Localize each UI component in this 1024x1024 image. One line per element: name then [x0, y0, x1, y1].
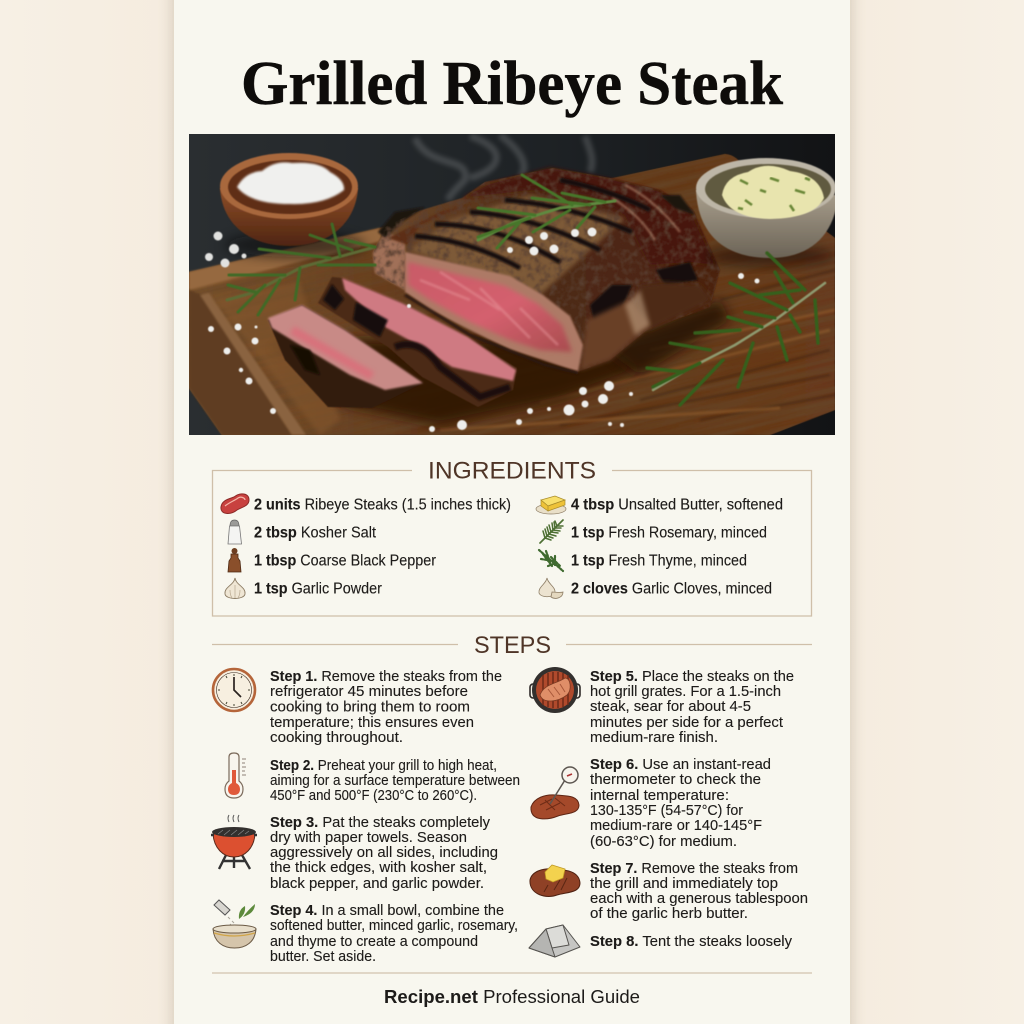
step 1: temperature; this ensures even	[270, 714, 474, 731]
step 1: cooking to bring them to room	[270, 698, 470, 716]
step 5: Step 5. Place the steaks on the	[590, 668, 794, 685]
loose salt on dark surface	[205, 232, 246, 268]
rosemary sprig on steak	[478, 175, 615, 248]
step 1: cooking throughout.	[270, 729, 403, 746]
step 8: Step 8. Tent the steaks loosely	[590, 933, 792, 950]
rosemary sprig right	[647, 253, 825, 405]
step 3: aggressively on all sides, including	[270, 844, 498, 861]
recipe card	[170, 0, 854, 1024]
bowl of salt	[220, 153, 365, 257]
step 3: Step 3. Pat the steaks completely	[270, 814, 490, 831]
step 4	[213, 900, 518, 965]
ingredient: garlic powder	[225, 578, 382, 598]
middle steak slice	[318, 277, 517, 407]
main ribeye steak	[370, 165, 725, 375]
step 6: thermometer to check the	[590, 771, 761, 788]
salt crystals on board and steak	[208, 228, 760, 432]
step 8	[529, 925, 792, 957]
ingredient: garlic cloves: 2 cloves Garlic Cloves, minced	[571, 580, 772, 598]
step 5: medium-rare finish.	[590, 729, 718, 746]
ingredient: kosher salt: 2 tbsp Kosher Salt	[254, 524, 377, 542]
rosemary sprig left	[227, 224, 375, 315]
icon: seasoning and mixing bowl	[213, 900, 256, 948]
footer: Recipe.net Professional Guide	[384, 987, 640, 1007]
step 5: hot grill grates. For a 1.5-inch	[590, 683, 781, 700]
icon: thermometer	[225, 753, 246, 798]
step 1	[213, 668, 502, 746]
ingredient: butter: 4 tbsp Unsalted Butter, softened	[571, 496, 783, 514]
step 2: Step 2. Preheat your grill to high heat,	[270, 757, 497, 774]
step 4: Step 4. In a small bowl, combine the	[270, 902, 504, 919]
smoke	[415, 135, 592, 200]
step 1: refrigerator 45 minutes before	[270, 683, 468, 700]
icon: clock	[213, 669, 255, 711]
title: Grilled Ribeye Steak	[241, 50, 783, 118]
step 6: internal temperature:	[590, 787, 729, 804]
step 7	[530, 860, 808, 922]
ingredients panel	[212, 470, 812, 616]
ingredient: rosemary: 1 tsp Fresh Rosemary, minced	[571, 524, 767, 542]
step 6: 130-135°F (54-57°C) for	[590, 802, 743, 819]
hero photo: grilled ribeye on a cutting board	[189, 134, 835, 435]
icon: steak on round grill	[530, 667, 580, 713]
icon: kettle grill	[211, 815, 257, 869]
wooden cutting board	[189, 154, 835, 435]
step 7: the grill and immediately top	[590, 875, 778, 892]
icon: meat thermometer in steak	[531, 767, 579, 819]
ingredient: garlic powder: 1 tsp Garlic Powder	[254, 580, 382, 598]
ingredient: thyme: 1 tsp Fresh Thyme, minced	[571, 552, 747, 570]
ingredients heading: INGREDIENTS	[428, 458, 596, 484]
step 2	[225, 753, 520, 804]
butter bowl	[696, 158, 838, 266]
step 2: aiming for a surface temperature between	[270, 772, 520, 789]
step 4: and thyme to create a compound	[270, 933, 478, 950]
step 5: minutes per side for a perfect	[590, 714, 784, 731]
front steak slice	[268, 305, 423, 408]
step 3: dry with paper towels. Season	[270, 829, 467, 846]
ingredient: rosemary	[540, 520, 767, 543]
step 5: steak, sear for about 4-5	[590, 698, 751, 715]
ingredient: kosher salt	[228, 520, 377, 544]
step 3: the thick edges, with kosher salt,	[270, 859, 487, 876]
step 6: Step 6. Use an instant-read	[590, 756, 771, 773]
step 6	[531, 756, 771, 850]
ingredient: thyme	[539, 550, 747, 571]
step 6: medium-rare or 140-145°F	[590, 817, 762, 834]
step 3	[211, 814, 498, 892]
step 7: Step 7. Remove the steaks from	[590, 860, 798, 877]
ingredient: garlic cloves	[539, 578, 772, 598]
ingredient: black pepper: 1 tbsp Coarse Black Pepper	[254, 552, 436, 570]
footer rule	[212, 972, 812, 974]
step 1: Step 1. Remove the steaks from the	[270, 668, 502, 685]
ingredient: black pepper	[228, 548, 436, 572]
step 2: 450°F and 500°F (230°C to 260°C).	[270, 787, 477, 804]
step 7: of the garlic herb butter.	[590, 905, 748, 922]
step 4: butter. Set aside.	[270, 948, 376, 965]
steps heading rules	[212, 644, 812, 646]
pink cut face	[405, 252, 583, 372]
step 4: softened butter, minced garlic, rosemary,	[270, 917, 518, 934]
ingredient: ribeye steaks: 2 units Ribeye Steaks (1.5 inches thick)	[254, 496, 511, 514]
step 3: black pepper, and garlic powder.	[270, 875, 484, 892]
step 5	[530, 667, 794, 746]
step 7: each with a generous tablespoon	[590, 890, 808, 907]
step 6: (60-63°C) for medium.	[590, 833, 737, 850]
steps heading: STEPS	[474, 632, 551, 659]
icon: steak with butter pat	[530, 865, 580, 896]
icon: foil tent	[529, 925, 580, 957]
